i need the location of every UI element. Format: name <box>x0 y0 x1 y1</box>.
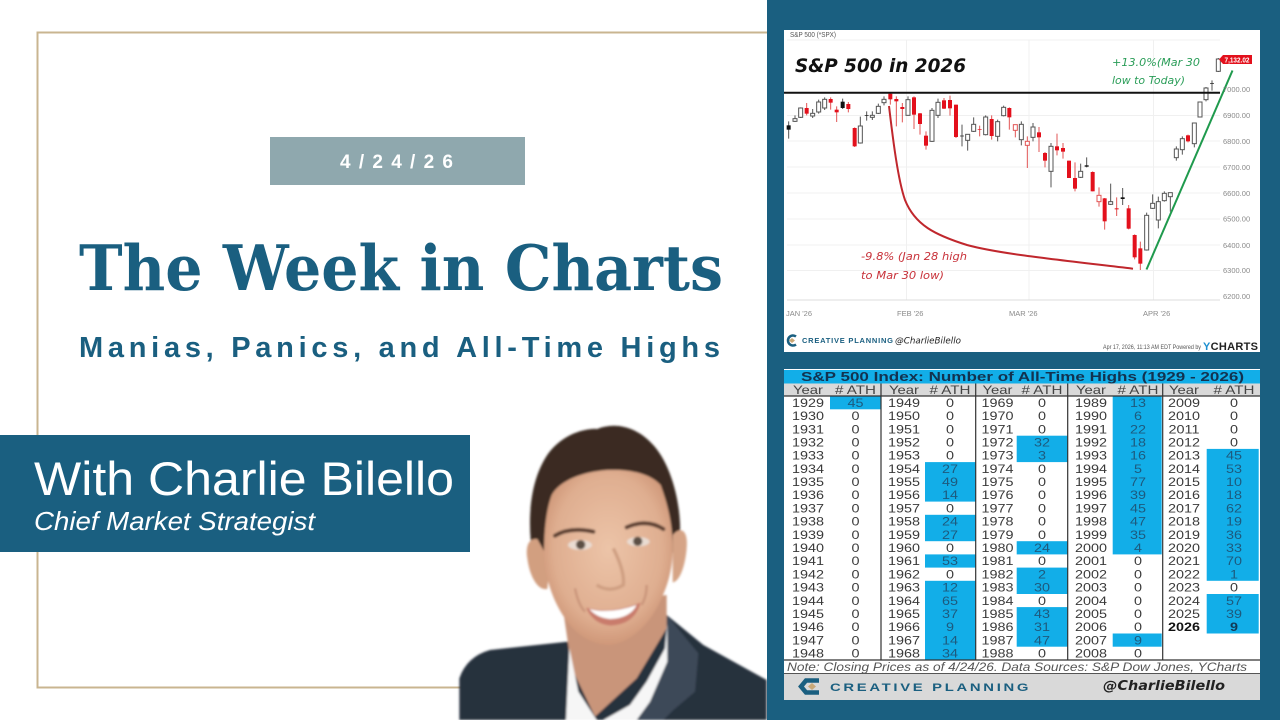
column 2009-2026 counts: 1 <box>1230 568 1238 581</box>
column 1949-1968 counts: 24 <box>942 515 958 528</box>
column 1969-1988 counts: 2 <box>1038 568 1046 581</box>
column 1969-1988 years: 1972 <box>981 436 1014 449</box>
y axis labels: 6900.00 <box>1223 111 1250 120</box>
y axis labels <box>1223 85 1250 301</box>
column 1929-1948 years: 1947 <box>792 633 824 647</box>
chart heading: S&P 500 in 2026 <box>795 55 966 77</box>
loss annotation: to Mar 30 low) <box>861 269 944 282</box>
column 1949-1968 counts: 27 <box>942 528 958 542</box>
column 1969-1988 counts: 47 <box>1034 633 1050 647</box>
column 1989-2008 counts <box>1130 396 1146 660</box>
column 1949-1968 counts: 0 <box>946 502 954 515</box>
column 1989-2008 counts: 13 <box>1130 396 1146 410</box>
subtitle: Manias, Panics, and All-Time Highs <box>79 332 720 364</box>
column 1989-2008 years: 2005 <box>1075 607 1107 621</box>
column 1989-2008 counts: 0 <box>1134 647 1142 660</box>
column 1949-1968 counts: 0 <box>946 449 954 462</box>
x axis labels <box>786 309 1170 318</box>
column 1969-1988 counts: 0 <box>1038 409 1046 423</box>
column 1949-1968 years: 1952 <box>888 436 920 449</box>
column 2009-2026 years: 2025 <box>1168 607 1200 621</box>
column 1969-1988 years: 1973 <box>981 449 1014 462</box>
column 1949-1968 counts: 9 <box>946 620 954 634</box>
column 1989-2008 counts: 0 <box>1134 581 1142 594</box>
column 2009-2026 years: 2021 <box>1168 554 1200 568</box>
column 1989-2008 years: 1996 <box>1075 488 1107 502</box>
column 1969-1988 years: 1980 <box>981 541 1014 555</box>
column 1929-1948 counts: 0 <box>851 422 860 436</box>
column 2009-2026 years: 2014 <box>1168 462 1200 476</box>
price tag: 7,132.02 <box>1224 58 1250 64</box>
column 1929-1948 years: 1939 <box>792 528 824 542</box>
column 1969-1988 counts: 0 <box>1038 647 1046 660</box>
column 1989-2008 years: 1997 <box>1075 502 1107 515</box>
column 1929-1948 years: 1930 <box>792 409 824 423</box>
column 1949-1968 counts: 37 <box>942 607 958 621</box>
table source note: Note: Closing Prices as of 4/24/26. Data Sources: S&P Dow Jones, YCharts <box>787 662 1247 674</box>
column 2009-2026 counts: 0 <box>1230 581 1238 594</box>
column 1969-1988 years: 1974 <box>981 462 1014 476</box>
column 1929-1948 years: 1943 <box>792 581 824 594</box>
x axis labels: JAN '26 <box>786 309 812 318</box>
column 2009-2026 counts: 57 <box>1226 594 1242 608</box>
date badge <box>270 137 525 185</box>
column 1949-1968 counts: 0 <box>946 436 954 449</box>
column 1949-1968 counts: 0 <box>946 568 954 581</box>
column 2009-2026 years: 2026 <box>1168 620 1200 634</box>
column 1929-1948 counts: 0 <box>851 409 860 423</box>
column 2009-2026 counts: 10 <box>1226 475 1242 489</box>
column 1949-1968 years: 1954 <box>888 462 920 476</box>
column 1989-2008 counts: 0 <box>1134 620 1142 634</box>
column 1989-2008 years: 2004 <box>1075 594 1107 608</box>
column 1929-1948 years: 1934 <box>792 462 824 476</box>
x axis labels: MAR '26 <box>1009 309 1038 318</box>
column 1929-1948 years: 1941 <box>792 554 824 568</box>
title: The Week in Charts <box>79 231 723 305</box>
column 1989-2008 years: 2000 <box>1075 541 1107 555</box>
column 2009-2026 counts: 9 <box>1230 620 1238 634</box>
column 1949-1968 counts: 14 <box>942 488 958 502</box>
presenter banner <box>0 435 470 552</box>
column 1929-1948 years: 1937 <box>792 502 824 515</box>
column 1969-1988 counts: 0 <box>1038 396 1046 410</box>
table header row: Year <box>1169 383 1199 397</box>
column 2009-2026 years <box>1168 396 1200 634</box>
presenter portrait <box>459 426 767 720</box>
column 1989-2008 counts: 22 <box>1130 422 1146 436</box>
presenter banner: Chief Market Strategist <box>34 506 317 536</box>
column 1929-1948 counts: 0 <box>851 594 860 608</box>
column 1969-1988 years: 1981 <box>981 554 1014 568</box>
column 1929-1948 counts: 0 <box>851 620 860 634</box>
x axis labels: APR '26 <box>1143 309 1170 318</box>
table footer branding: CREATIVE PLANNING <box>830 681 1028 694</box>
column 2009-2026 years: 2020 <box>1168 541 1200 555</box>
column 1949-1968 counts: 27 <box>942 462 958 476</box>
column 1969-1988 years: 1969 <box>981 396 1014 410</box>
chart footer branding: @CharlieBilello <box>895 336 961 346</box>
column 1989-2008 counts: 5 <box>1134 462 1142 476</box>
column 1929-1948 counts: 0 <box>851 581 860 594</box>
column 2009-2026 years: 2012 <box>1168 436 1200 449</box>
column 1989-2008 counts: 0 <box>1134 607 1142 621</box>
column 2009-2026 years: 2017 <box>1168 502 1200 515</box>
column 1989-2008 counts: 35 <box>1130 528 1146 542</box>
table header row: Year <box>1076 383 1106 397</box>
column 1929-1948 counts: 0 <box>851 607 860 621</box>
column 1929-1948 counts: 0 <box>851 541 860 555</box>
column 2009-2026 years: 2010 <box>1168 409 1200 423</box>
column 1989-2008 years: 1992 <box>1075 436 1107 449</box>
column 1929-1948 counts: 0 <box>851 633 860 647</box>
column 1989-2008 counts: 18 <box>1130 436 1146 449</box>
column 1949-1968 years: 1961 <box>888 554 920 568</box>
x axis labels: FEB '26 <box>897 309 923 318</box>
column 1929-1948 years: 1935 <box>792 475 824 489</box>
column 1929-1948 years: 1936 <box>792 488 824 502</box>
column 1949-1968 counts: 0 <box>946 396 954 410</box>
column 1969-1988 counts: 0 <box>1038 528 1046 542</box>
table header row <box>784 383 1260 397</box>
column 2009-2026 counts: 36 <box>1226 528 1242 542</box>
column 1989-2008 counts: 6 <box>1134 409 1142 423</box>
y axis labels: 6200.00 <box>1223 292 1250 301</box>
gold frame <box>38 32 767 688</box>
column 1989-2008 counts: 16 <box>1130 449 1146 462</box>
column 2009-2026 counts: 18 <box>1226 488 1242 502</box>
column 1969-1988 years: 1977 <box>981 502 1014 515</box>
column 1969-1988 years: 1986 <box>981 620 1014 634</box>
column 1969-1988 years: 1978 <box>981 515 1014 528</box>
column 1989-2008 years: 2002 <box>1075 568 1107 581</box>
column 1969-1988 counts: 0 <box>1038 515 1046 528</box>
y axis labels: 6400.00 <box>1223 241 1250 250</box>
column 1949-1968 counts: 53 <box>942 554 958 568</box>
gain annotation <box>1112 56 1200 87</box>
column 1989-2008 counts: 77 <box>1130 475 1146 489</box>
column 1949-1968 years: 1960 <box>888 541 920 555</box>
column 2009-2026 years: 2016 <box>1168 488 1200 502</box>
right column background <box>767 0 1280 720</box>
column 1929-1948 years: 1932 <box>792 436 824 449</box>
column 1929-1948 counts: 0 <box>851 488 860 502</box>
column 1949-1968 years: 1963 <box>888 581 920 594</box>
table header row: # ATH <box>930 383 970 397</box>
column 2009-2026 years: 2011 <box>1169 422 1199 436</box>
column 2009-2026 counts: 0 <box>1230 422 1238 436</box>
table header row: Year <box>793 383 823 397</box>
gain annotation: +13.0%(Mar 30 <box>1112 56 1200 69</box>
column 1969-1988 years: 1985 <box>981 607 1014 621</box>
column 2009-2026 counts: 62 <box>1226 502 1242 515</box>
column 1929-1948 years: 1940 <box>792 541 824 555</box>
highlighted cells <box>830 396 1259 660</box>
column 1929-1948 years: 1944 <box>792 594 824 608</box>
column 1929-1948 years: 1929 <box>792 396 824 410</box>
column 2009-2026 counts: 0 <box>1230 409 1238 423</box>
column 2009-2026 years: 2013 <box>1168 449 1200 462</box>
column 2009-2026 years: 2024 <box>1168 594 1200 608</box>
column 1969-1988 years: 1984 <box>981 594 1014 608</box>
column 1969-1988 years: 1975 <box>981 475 1014 489</box>
column 1989-2008 years: 1989 <box>1075 396 1107 410</box>
column 1929-1948 years: 1931 <box>792 422 824 436</box>
column 2009-2026 years: 2023 <box>1168 581 1200 594</box>
column 1949-1968 years: 1966 <box>888 620 920 634</box>
column 1989-2008 counts: 0 <box>1134 554 1142 568</box>
y axis labels: 6300.00 <box>1223 266 1250 275</box>
column 2009-2026 counts: 45 <box>1226 449 1242 462</box>
column 1929-1948 years: 1933 <box>792 449 824 462</box>
column 2009-2026 counts: 0 <box>1230 436 1238 449</box>
column 1949-1968 counts: 0 <box>946 541 954 555</box>
column 1929-1948 counts <box>847 396 864 660</box>
column 1929-1948 years: 1938 <box>792 515 824 528</box>
table header row: Year <box>889 383 919 397</box>
column 1969-1988 years: 1970 <box>981 409 1014 423</box>
column 1929-1948 counts: 0 <box>851 528 860 542</box>
table header row: # ATH <box>1118 383 1158 397</box>
table footer branding <box>784 674 1260 700</box>
column 1989-2008 years: 2001 <box>1075 554 1107 568</box>
all-time high reference line <box>784 92 1220 94</box>
chart footer branding: CREATIVE PLANNING <box>802 336 893 345</box>
column 1929-1948 years: 1946 <box>792 620 824 634</box>
column 1969-1988 counts: 31 <box>1034 620 1050 634</box>
column 1969-1988 counts: 0 <box>1038 422 1046 436</box>
column 1969-1988 counts: 24 <box>1034 541 1050 555</box>
table title bar <box>784 370 1260 384</box>
column 1969-1988 counts: 0 <box>1038 554 1046 568</box>
column 1969-1988 counts: 32 <box>1034 436 1050 449</box>
y axis labels: 6800.00 <box>1223 137 1250 146</box>
column 1949-1968 counts: 14 <box>942 633 958 647</box>
column 1929-1948 counts: 0 <box>851 475 860 489</box>
column 2009-2026 counts <box>1226 396 1242 634</box>
column 1989-2008 years: 1999 <box>1075 528 1107 542</box>
table header row: # ATH <box>1214 383 1254 397</box>
y axis labels: 6600.00 <box>1223 189 1250 198</box>
column 1969-1988 years: 1988 <box>981 647 1014 660</box>
column 1989-2008 years: 1991 <box>1075 422 1107 436</box>
column 1929-1948 counts: 0 <box>851 647 860 660</box>
column 1929-1948 counts: 0 <box>851 515 860 528</box>
loss annotation <box>861 250 967 282</box>
column 1929-1948 years: 1948 <box>792 647 824 660</box>
y axis labels: 6500.00 <box>1223 214 1250 224</box>
column 1989-2008 years: 1990 <box>1075 409 1107 423</box>
column 1949-1968 counts: 12 <box>942 581 958 594</box>
column 1949-1968 years: 1965 <box>888 607 920 621</box>
column 1989-2008 counts: 47 <box>1130 515 1146 528</box>
column 1949-1968 years: 1953 <box>888 449 920 462</box>
column 2009-2026 counts: 0 <box>1230 396 1238 410</box>
column 1989-2008 counts: 0 <box>1134 568 1142 581</box>
column 1989-2008 years: 2006 <box>1075 620 1107 634</box>
column 1949-1968 years: 1967 <box>888 633 920 647</box>
column 1949-1968 counts <box>942 396 958 660</box>
candlesticks March to April <box>1025 58 1220 270</box>
column 1989-2008 years: 1993 <box>1075 449 1107 462</box>
chart footer branding <box>788 336 1258 353</box>
table header row: # ATH <box>1022 383 1062 397</box>
column 1969-1988 counts: 30 <box>1034 581 1050 594</box>
column 1949-1968 counts: 49 <box>942 475 958 489</box>
column 1949-1968 years <box>888 396 920 660</box>
column 1949-1968 years: 1962 <box>888 568 920 581</box>
column 1949-1968 years: 1968 <box>888 647 920 660</box>
column 2009-2026 years: 2015 <box>1168 475 1200 489</box>
column 1949-1968 years: 1958 <box>888 515 920 528</box>
red drawdown curve <box>889 106 1133 269</box>
column 1949-1968 counts: 65 <box>942 594 958 608</box>
column 1929-1948 counts: 0 <box>851 436 860 449</box>
column 1949-1968 years: 1964 <box>888 594 920 608</box>
column 1949-1968 years: 1959 <box>888 528 920 542</box>
y axis labels: 6700.00 <box>1223 163 1250 172</box>
column 1989-2008 years: 2003 <box>1075 581 1107 594</box>
column 1989-2008 years: 1998 <box>1075 515 1107 528</box>
column 1969-1988 counts: 0 <box>1038 488 1046 502</box>
table header row: # ATH <box>835 383 876 397</box>
y axis labels: 7000.00 <box>1223 85 1250 94</box>
chart footer branding: YCHARTS <box>1203 341 1258 353</box>
column 1929-1948 years <box>792 396 824 660</box>
column 1949-1968 years: 1957 <box>888 502 920 515</box>
column 2009-2026 counts: 70 <box>1226 554 1242 568</box>
column 1949-1968 years: 1956 <box>888 488 920 502</box>
table header row: Year <box>982 383 1012 397</box>
column 1969-1988 years <box>981 396 1014 660</box>
column 2009-2026 years: 2009 <box>1168 396 1200 410</box>
column 1969-1988 years: 1971 <box>981 422 1014 436</box>
column 1949-1968 years: 1951 <box>888 422 920 436</box>
column 1949-1968 years: 1949 <box>888 396 920 410</box>
column 1989-2008 counts: 45 <box>1130 502 1146 515</box>
presenter banner: With Charlie Bilello <box>34 452 454 505</box>
green rally line <box>1146 70 1232 270</box>
column 1989-2008 years: 1995 <box>1075 475 1107 489</box>
column 1929-1948 counts: 0 <box>851 462 860 476</box>
candlesticks January to March <box>787 93 1023 151</box>
column 1989-2008 years <box>1075 396 1107 660</box>
loss annotation: -9.8% (Jan 28 high <box>861 250 967 263</box>
column 1969-1988 counts: 0 <box>1038 594 1046 608</box>
column 1949-1968 years: 1955 <box>888 475 920 489</box>
column 1989-2008 counts: 9 <box>1134 633 1142 647</box>
price tag <box>1219 55 1252 64</box>
column 1989-2008 counts: 4 <box>1134 541 1142 555</box>
gain annotation: low to Today) <box>1112 74 1185 87</box>
column 2009-2026 counts: 33 <box>1226 541 1242 555</box>
column 1929-1948 counts: 0 <box>851 554 860 568</box>
column 1969-1988 counts: 3 <box>1038 449 1046 462</box>
column 1969-1988 counts <box>1034 396 1050 660</box>
column 1989-2008 years: 2008 <box>1075 647 1107 660</box>
date badge: 4/24/26 <box>340 152 453 173</box>
column 2009-2026 counts: 19 <box>1226 515 1242 528</box>
column 2009-2026 years: 2018 <box>1168 515 1200 528</box>
column 1929-1948 counts: 45 <box>847 396 864 410</box>
column 1969-1988 counts: 0 <box>1038 462 1046 476</box>
column 1949-1968 years: 1950 <box>888 409 920 423</box>
column 1969-1988 years: 1976 <box>981 488 1014 502</box>
chart series label: S&P 500 (*SPX) <box>790 32 836 39</box>
column 1969-1988 years: 1987 <box>981 633 1014 647</box>
column 1969-1988 counts: 0 <box>1038 475 1046 489</box>
column 1969-1988 counts: 0 <box>1038 502 1046 515</box>
column 1969-1988 years: 1982 <box>981 568 1014 581</box>
column 1929-1948 years: 1945 <box>792 607 824 621</box>
column 2009-2026 years: 2022 <box>1168 568 1200 581</box>
column 1929-1948 counts: 0 <box>851 449 860 462</box>
column 1929-1948 years: 1942 <box>792 568 824 581</box>
column 1929-1948 counts: 0 <box>851 502 860 515</box>
table title bar: S&P 500 Index: Number of All-Time Highs (1929 - 2026) <box>801 370 1244 384</box>
column 1969-1988 years: 1983 <box>981 581 1014 594</box>
column 2009-2026 counts: 53 <box>1226 462 1242 476</box>
column 1949-1968 counts: 0 <box>946 409 954 423</box>
column 2009-2026 counts: 39 <box>1226 607 1242 621</box>
panel: S&P 500 candlestick chart <box>784 30 1260 353</box>
column 1989-2008 counts: 0 <box>1134 594 1142 608</box>
column 2009-2026 years: 2019 <box>1168 528 1200 542</box>
column 1969-1988 counts: 43 <box>1034 607 1050 621</box>
column 1989-2008 years: 2007 <box>1075 633 1107 647</box>
column 1969-1988 years: 1979 <box>981 528 1014 542</box>
chart footer branding: Apr 17, 2026, 11:13 AM EDT Powered by <box>1103 345 1201 351</box>
column 1929-1948 counts: 0 <box>851 568 860 581</box>
panel: all-time highs table <box>784 369 1260 700</box>
table footer branding: @CharlieBilello <box>1103 679 1225 694</box>
column 1949-1968 counts: 0 <box>946 422 954 436</box>
column 1989-2008 counts: 39 <box>1130 488 1146 502</box>
column 1949-1968 counts: 34 <box>942 647 958 660</box>
column 1989-2008 years: 1994 <box>1075 462 1107 476</box>
